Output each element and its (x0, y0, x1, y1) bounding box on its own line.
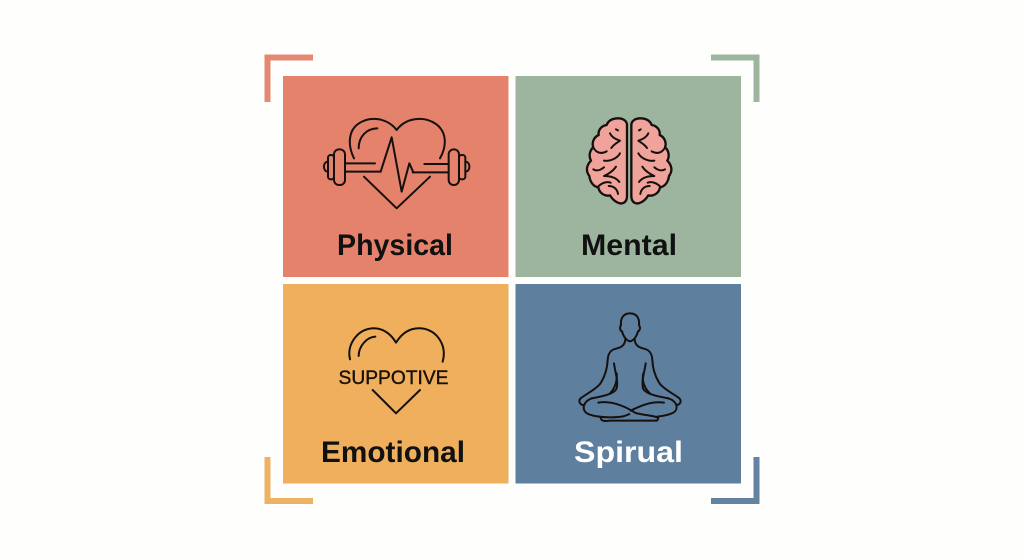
icon: supportive heart (349, 328, 444, 413)
panel: mental (516, 76, 741, 277)
corner bracket: top right (711, 58, 756, 102)
panel: spiritual (516, 284, 741, 484)
corner bracket: top left (268, 58, 313, 102)
panel: physical (283, 76, 508, 277)
icon: heart with dumbbell and pulse (324, 119, 469, 208)
label: Spirual: Spirual (574, 436, 683, 469)
text: SUPPOTIVE: SUPPOTIVE (338, 368, 448, 389)
label: Physical: Physical (337, 229, 453, 262)
icon: meditating figure (579, 313, 681, 421)
corner bracket: bottom left (268, 457, 313, 501)
label: Mental: Mental (581, 229, 677, 262)
label: Emotional: Emotional (321, 436, 465, 469)
panel: emotional (283, 284, 508, 484)
icon: brain (587, 118, 671, 203)
corner bracket: bottom right (711, 457, 756, 501)
